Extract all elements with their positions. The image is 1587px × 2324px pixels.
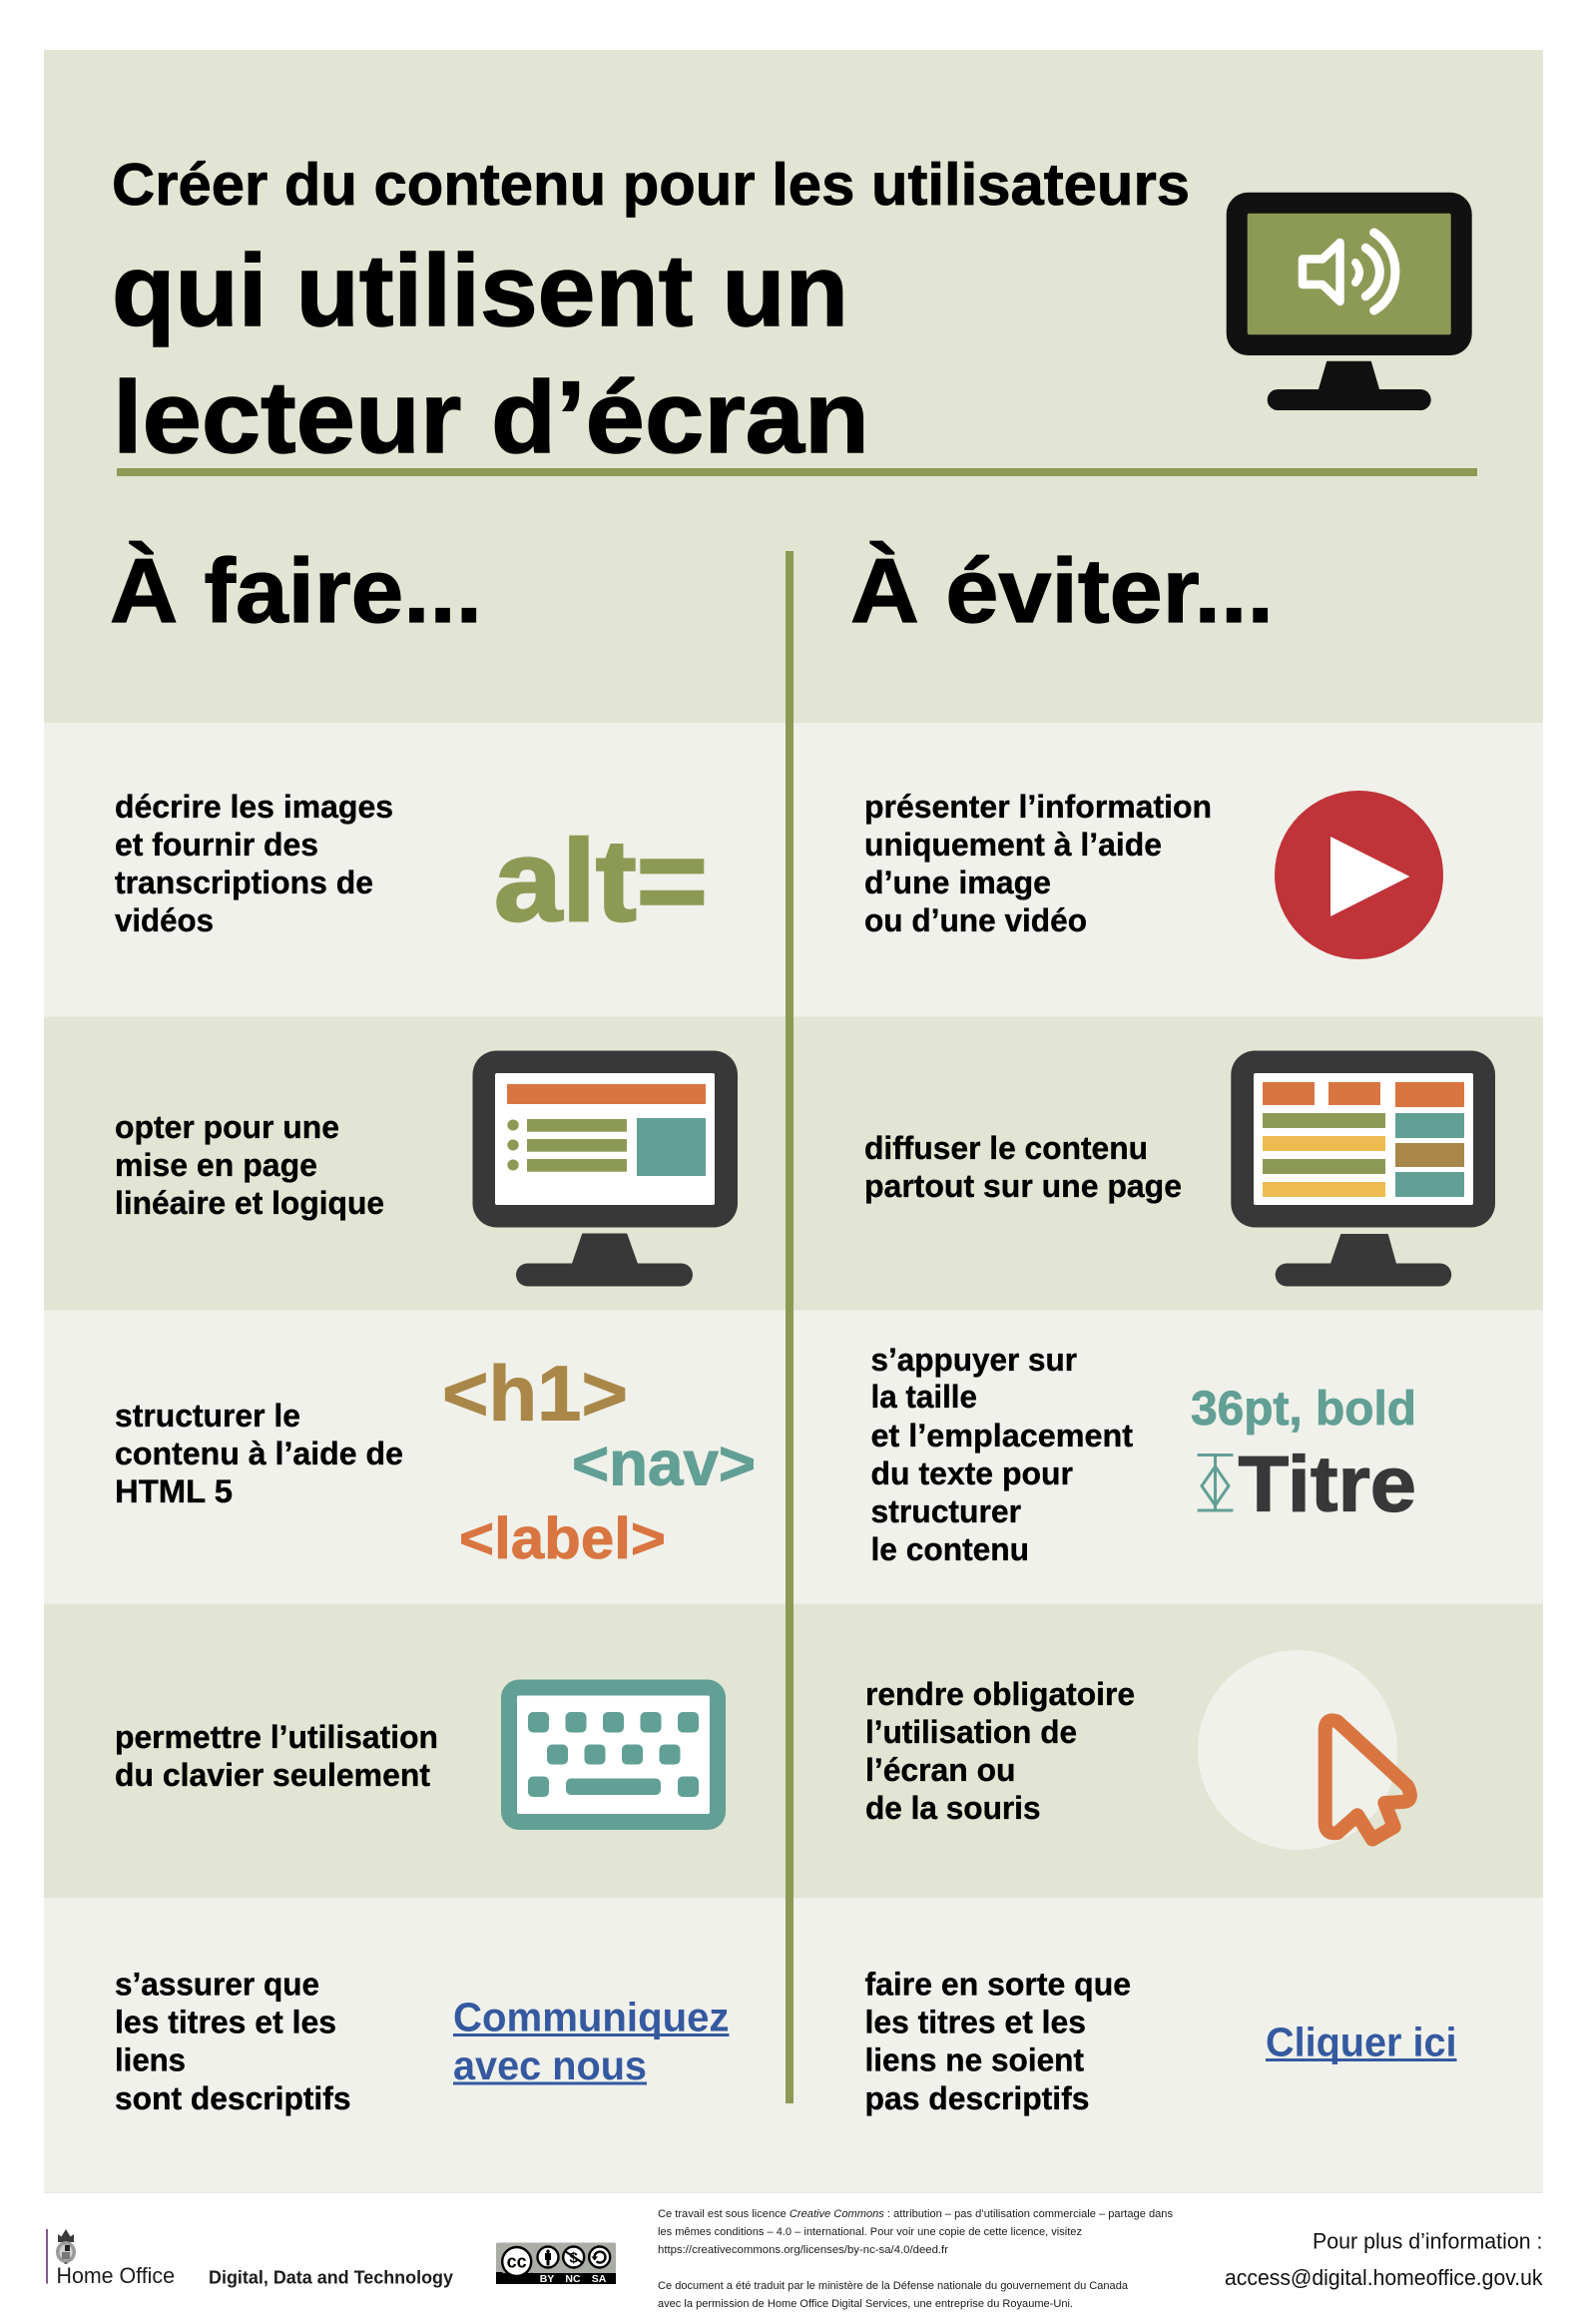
text: size and position: et l’emplacement bbox=[870, 1418, 1133, 1453]
text: describe images bbox=[115, 789, 393, 938]
icon: HTML tags: <h1> bbox=[442, 1350, 628, 1438]
text: non-descriptive links: pas descriptifs bbox=[864, 2080, 1090, 2116]
icon: monitor with speaker bbox=[1227, 193, 1472, 410]
icon: Creative Commons badge: NC bbox=[565, 2273, 581, 2285]
text: image-only information: uniquement à l’aide bbox=[864, 827, 1162, 863]
icon: Creative Commons badge bbox=[496, 2242, 616, 2285]
icon: HTML tags: <label> bbox=[459, 1506, 666, 1571]
title: main lines bbox=[112, 234, 869, 474]
text: size and position: le contenu bbox=[870, 1531, 1029, 1567]
text: linear layout bbox=[115, 1109, 384, 1221]
text: describe images: décrire les images bbox=[115, 789, 393, 825]
panel: row 2 bbox=[44, 1016, 1543, 1310]
footer text: contact: access@digital.homeoffice.gov.uk bbox=[1225, 2265, 1543, 2290]
link sample: descriptive: Communiquez bbox=[453, 1995, 729, 2040]
text: keyboard only: du clavier seulement bbox=[115, 1757, 430, 1793]
text: non-descriptive links: liens ne soient bbox=[864, 2042, 1084, 2078]
footer text: licence bbox=[658, 2208, 1173, 2310]
footer text: contact bbox=[1225, 2228, 1543, 2290]
text: descriptive links: sont descriptifs bbox=[115, 2080, 351, 2116]
text: mandatory mouse: l’utilisation de bbox=[865, 1714, 1077, 1750]
text: image-only information: d’une image bbox=[864, 865, 1051, 900]
link sample: descriptive: avec nous bbox=[453, 2042, 647, 2088]
panel: row 5 bbox=[44, 1898, 1543, 2192]
text: mandatory mouse bbox=[865, 1676, 1135, 1826]
text: HTML5 structure: structurer le bbox=[115, 1398, 300, 1434]
footer text: contact: Pour plus d’information : bbox=[1313, 2228, 1543, 2254]
text: size and position: du texte pour bbox=[870, 1455, 1073, 1491]
icon: Creative Commons badge: $ bbox=[570, 2250, 579, 2266]
link sample: descriptive bbox=[453, 1995, 729, 2088]
text: descriptive links: s’assurer que bbox=[115, 1967, 319, 2003]
icon: text height marker bbox=[1198, 1455, 1233, 1510]
text: image-only information: présenter l’information bbox=[864, 789, 1212, 825]
icon: monitor with scattered layout bbox=[1231, 1050, 1495, 1286]
text: describe images: vidéos bbox=[115, 902, 214, 938]
text: image-only information: ou d’une vidéo bbox=[864, 902, 1087, 938]
text: describe images: et fournir des bbox=[115, 827, 318, 863]
icon: play button bbox=[1275, 791, 1443, 959]
text: descriptive links: liens bbox=[115, 2042, 186, 2078]
text: keyboard only: permettre l’utilisation bbox=[115, 1719, 438, 1755]
panel: row 1 bbox=[44, 723, 1543, 1016]
text: non-descriptive links bbox=[864, 1967, 1131, 2116]
text: non-descriptive links: les titres et les bbox=[864, 2005, 1086, 2040]
link sample: click here: Cliquer ici bbox=[1266, 2019, 1457, 2064]
panel: row 4 bbox=[44, 1603, 1543, 1898]
panel: header bbox=[44, 50, 1543, 723]
title: main lines: lecteur d’écran bbox=[113, 360, 869, 474]
text: linear layout: mise en page bbox=[115, 1147, 317, 1183]
column divider bbox=[786, 551, 794, 2103]
text: mandatory mouse: de la souris bbox=[865, 1790, 1040, 1826]
text: mandatory mouse: rendre obligatoire bbox=[865, 1676, 1135, 1712]
text: HTML5 structure: HTML 5 bbox=[115, 1473, 233, 1509]
text: linear layout: opter pour une bbox=[115, 1109, 339, 1145]
footer text: licence: https://creativecommons.org/licenses/by-nc-sa/4.0/deed.fr bbox=[658, 2244, 948, 2256]
icon: Creative Commons badge: BY bbox=[540, 2273, 554, 2285]
icon: HTML tags: <nav> bbox=[572, 1430, 756, 1499]
text: descriptive links bbox=[115, 1967, 351, 2116]
icon: title sample: Titre bbox=[1238, 1440, 1416, 1527]
footer text: licence: avec la permission de Home Office Digital Services, une entreprise du Royaume-Uni. bbox=[658, 2298, 1073, 2310]
icon: keyboard bbox=[501, 1679, 726, 1830]
footer text: department: Digital, Data and Technology bbox=[209, 2268, 453, 2288]
text: size and position bbox=[870, 1342, 1133, 1567]
footer text: licence: Ce travail est sous licence Creative Commons : attribution – pas d’utilisation commerciale – partage dans bbox=[658, 2208, 1173, 2220]
text: mandatory mouse: l’écran ou bbox=[865, 1752, 1016, 1788]
text: scattered content bbox=[864, 1130, 1182, 1204]
text: HTML5 structure: contenu à l’aide de bbox=[115, 1436, 403, 1471]
icon: Creative Commons badge: SA bbox=[592, 2273, 607, 2285]
text: image-only information bbox=[864, 789, 1212, 938]
icon: HTML tags bbox=[442, 1350, 756, 1571]
title rule bbox=[117, 468, 1477, 476]
icon: monitor with linear layout bbox=[473, 1050, 738, 1286]
text: keyboard only bbox=[115, 1719, 438, 1793]
text: descriptive links: les titres et les bbox=[115, 2005, 336, 2040]
title: intro line: Créer du contenu pour les utilisateurs bbox=[112, 152, 1190, 218]
icon: Creative Commons badge: cc bbox=[507, 2252, 527, 2272]
text: scattered content: diffuser le contenu bbox=[864, 1130, 1148, 1166]
panel: row 3 bbox=[44, 1310, 1543, 1603]
icon: alt attribute: alt= bbox=[494, 816, 708, 945]
footer logo: Home Office bbox=[46, 2229, 175, 2288]
text: size and position: structurer bbox=[870, 1493, 1021, 1529]
icon: mouse pointer bbox=[1198, 1650, 1410, 1850]
title: main lines: qui utilisent un bbox=[112, 234, 848, 347]
text: scattered content: partout sur une page bbox=[864, 1168, 1182, 1204]
text: describe images: transcriptions de bbox=[115, 865, 373, 900]
heading: don't: À éviter... bbox=[850, 541, 1274, 642]
text: size and position: s’appuyer sur bbox=[870, 1342, 1077, 1378]
text: linear layout: linéaire et logique bbox=[115, 1185, 384, 1221]
footer text: licence: Ce document a été traduit par le ministère de la Défense nationale du gouvernement du Canada bbox=[658, 2280, 1129, 2292]
text: Home Office: Home Office bbox=[56, 2263, 175, 2288]
footer text: licence: les mêmes conditions – 4.0 – international. Pour voir une copie de cette licence, visitez bbox=[658, 2226, 1082, 2238]
text: HTML5 structure bbox=[115, 1398, 403, 1509]
heading: do: À faire... bbox=[110, 541, 482, 642]
text: size and position: la taille bbox=[870, 1379, 977, 1415]
icon: font size label: 36pt, bold bbox=[1191, 1383, 1416, 1436]
icon: crest bbox=[56, 2229, 76, 2264]
text: non-descriptive links: faire en sorte que bbox=[864, 1967, 1131, 2003]
